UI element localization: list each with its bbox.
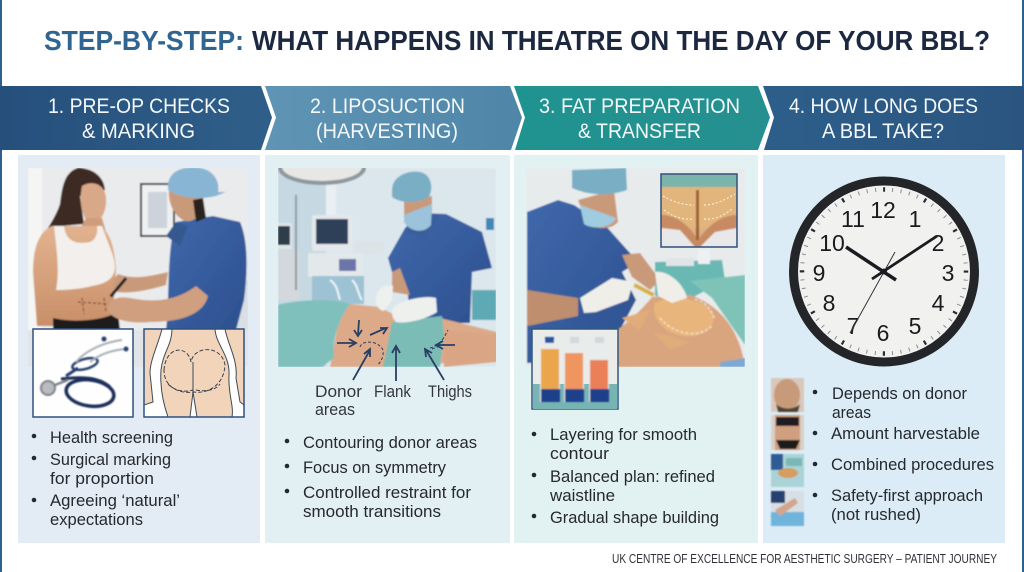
bullet list: how long: Amount harvestable <box>831 424 980 443</box>
bullet list: fat preparation <box>532 425 719 527</box>
inset: stethoscope <box>33 329 133 417</box>
thumbnail: procedure <box>771 454 804 487</box>
bullet list: pre-op checks <box>32 428 180 529</box>
clock: 11 <box>841 206 865 232</box>
bullet list: liposuction <box>285 433 477 521</box>
bullet list: how long: areas <box>832 403 871 422</box>
clock: 8 <box>823 290 835 316</box>
bullet list: liposuction: smooth transitions <box>303 502 441 521</box>
bullet list: liposuction: Focus on symmetry <box>303 458 446 477</box>
label: thighs: Thighs <box>428 382 472 401</box>
clock: 7 <box>847 313 859 339</box>
step header banner <box>0 86 1024 150</box>
donor markings and arrows <box>337 320 455 365</box>
bullet list: fat preparation: Balanced plan: refined <box>550 467 715 486</box>
panel: fat preparation <box>514 155 758 543</box>
step 2 header: (HARVESTING) <box>316 119 458 143</box>
photo: surgeon marking patient <box>28 168 248 367</box>
thumbnail: surgical team <box>771 491 804 526</box>
bullet list: pre-op checks: Agreeing ‘natural’ <box>50 491 180 510</box>
clock: 4 <box>932 290 945 316</box>
clock: 6 <box>877 320 889 346</box>
bullet list: pre-op checks: expectations <box>50 510 143 529</box>
panel: pre-op checks <box>18 155 260 543</box>
step 4 header: A BBL TAKE? <box>822 119 944 143</box>
bullet list: pre-op checks: Health screening <box>50 428 173 447</box>
bullet list: liposuction: Contouring donor areas <box>303 433 477 452</box>
label: donor areas: Donor <box>315 382 362 401</box>
thumbnail: abdomen before <box>771 378 804 412</box>
clock: 2 <box>932 230 944 256</box>
clock <box>789 176 979 366</box>
clock: 9 <box>813 260 825 286</box>
bullet list: how long <box>813 384 994 524</box>
photo: liposuction in theatre <box>278 151 497 367</box>
bullet list: fat preparation: Layering for smooth <box>550 425 697 444</box>
step 1 header <box>0 86 272 150</box>
inset: marked contour <box>661 174 737 247</box>
inset: prepared fat jars <box>532 329 618 409</box>
bullet list: fat preparation: contour <box>550 444 609 463</box>
bullet list: pre-op checks: for proportion <box>50 469 154 488</box>
bullet list: fat preparation: waistline <box>549 486 615 505</box>
step 2 header: 2. LIPOSUCTION <box>310 94 465 118</box>
step 3 header: & TRANSFER <box>578 119 701 143</box>
clock: 3 <box>942 260 954 286</box>
clock: 5 <box>909 313 921 339</box>
photo: fat transfer <box>526 168 745 367</box>
bullet list: how long: (not rushed) <box>831 505 921 524</box>
arrows to labels <box>353 346 444 381</box>
step 3 header <box>514 86 770 150</box>
step 3 header: 3. FAT PREPARATION <box>539 94 740 118</box>
label: flank: Flank <box>374 382 411 401</box>
bullet list: fat preparation: Gradual shape building <box>550 508 719 527</box>
title: STEP-BY-STEP: <box>44 25 244 56</box>
thumbnail: abdomen after <box>771 415 804 450</box>
bullet list: how long: Safety-first approach <box>831 486 983 505</box>
step 1 header: 1. PRE-OP CHECKS <box>48 94 230 118</box>
bullet list: how long: Depends on donor <box>832 384 967 403</box>
bullet list: how long: Combined procedures <box>831 455 994 474</box>
step 4 header <box>763 86 1024 150</box>
bullet list: pre-op checks: Surgical marking <box>50 450 171 469</box>
clock: 10 <box>819 230 845 256</box>
step 2 header <box>265 86 522 150</box>
step 1 header: & MARKING <box>82 119 195 143</box>
label: donor areas: areas <box>315 400 355 419</box>
clock: 12 <box>870 197 896 223</box>
inset: marking diagram <box>144 329 244 417</box>
title: WHAT HAPPENS IN THEATRE ON THE DAY OF YOUR BBL? <box>252 25 990 56</box>
clock: 1 <box>909 206 921 232</box>
step 4 header: 4. HOW LONG DOES <box>789 94 978 118</box>
bullet list: liposuction: Controlled restraint for <box>303 483 471 502</box>
panel: liposuction <box>265 151 510 543</box>
panel: how long <box>763 155 1005 543</box>
label: donor areas <box>315 382 362 419</box>
